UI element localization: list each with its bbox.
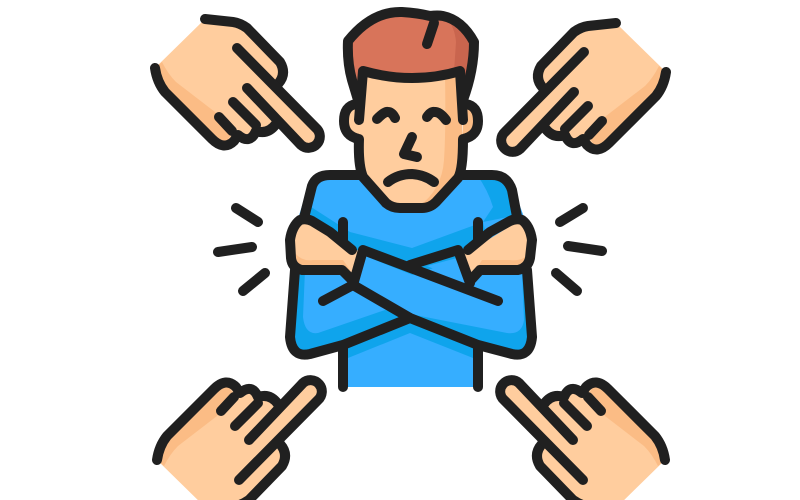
figure: right hand tucked on arm [462,219,532,281]
hand: bottom right pointing [500,380,665,500]
hand: top right pointing [501,23,666,152]
figure: crossed forearms [290,250,532,355]
emphasis lines: left [218,208,265,291]
figure: face [359,75,463,208]
hand: bottom left pointing [157,380,322,500]
emphasis lines: right [556,208,602,291]
hand: top left pointing [155,19,320,148]
figure: hair [348,12,474,120]
figure: shirt torso [290,175,532,387]
figure: eyes, nose and mouth [377,112,446,182]
figure: left hand tucked on arm [290,219,360,281]
figure: ears [344,104,478,140]
